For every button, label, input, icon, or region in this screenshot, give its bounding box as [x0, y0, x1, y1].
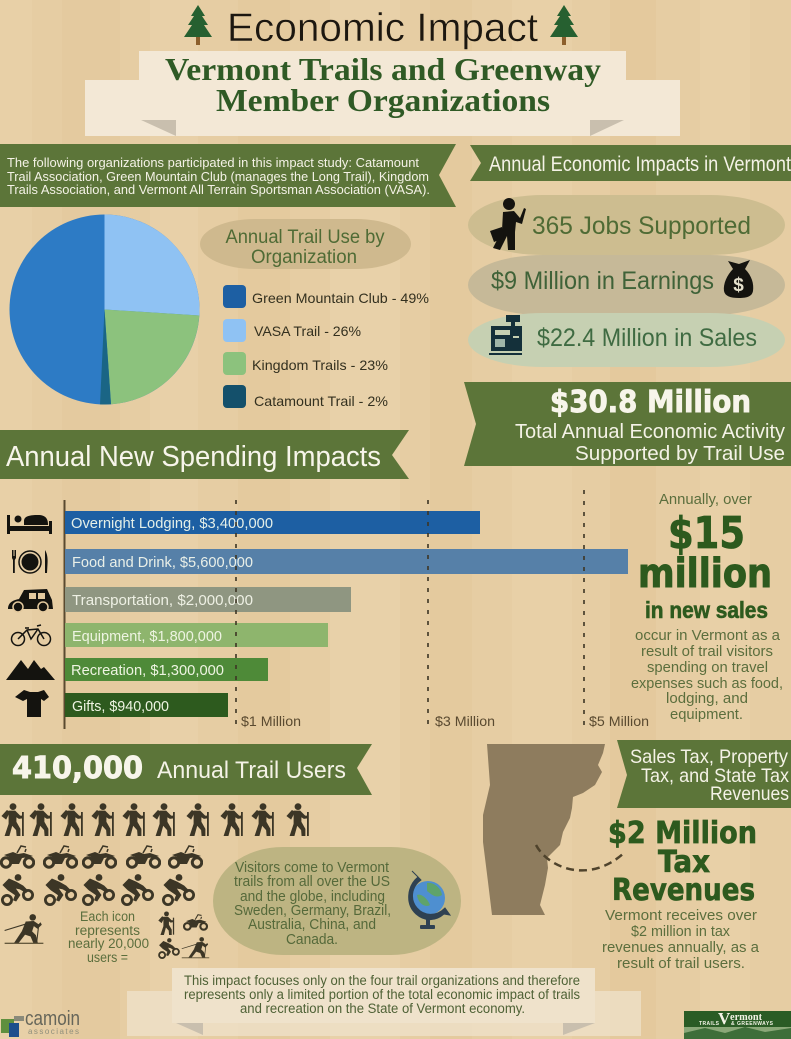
- bar: transportation: [65, 587, 351, 612]
- callout: $15 million in new sales: $15: [668, 508, 745, 559]
- pictogram: cyclists: [2, 874, 194, 905]
- oval heading: annual trail use by organization: [200, 219, 411, 269]
- dashed connector from map to tax callout: [536, 845, 625, 870]
- callout: $2 million tax revenues: $2 million in tax: [631, 923, 730, 940]
- logo: Camoin Associates: [1, 1008, 80, 1037]
- footer ribbon note: and recreation on the State of Vermont economy.: [240, 1001, 525, 1016]
- oval callout: visitors from around the globe: and the globe, including: [240, 889, 385, 905]
- bar: transportation: Transportation, $2,000,000: [72, 592, 253, 609]
- banner: annual economic impacts: [470, 145, 791, 181]
- callout: $15 million in new sales: lodging, and: [666, 690, 748, 707]
- banner: participating organizations: [0, 144, 456, 207]
- ovals: economic impact figures: [468, 195, 785, 367]
- oval callout: visitors from around the globe: Canada.: [286, 932, 338, 948]
- icon: left tree: [184, 5, 212, 45]
- logo: Camoin Associates: associates: [28, 1027, 79, 1036]
- oval: earnings: [468, 255, 785, 315]
- footer ribbon note: [127, 968, 641, 1036]
- oval: jobs: [468, 195, 785, 255]
- pictogram: ATVs: [1, 846, 202, 867]
- pie legend: Kingdom Trails - 23%: [252, 357, 388, 373]
- title: [184, 5, 578, 50]
- callout: $2 million tax revenues: revenues annually, as a: [602, 939, 760, 956]
- ribbon heading: [85, 51, 680, 136]
- callout: $15 million in new sales: equipment.: [670, 706, 743, 723]
- banner: annual new spending impacts: [0, 430, 409, 479]
- icon: mountains: [6, 660, 55, 680]
- callout: $15 million in new sales: million: [638, 551, 772, 597]
- bar: equipment: [65, 623, 328, 647]
- oval callout: visitors from around the globe: Sweden, Germany, Brazil,: [234, 903, 391, 919]
- icon legend: each icon represents nearly 20,000 users: Each icon: [80, 909, 135, 924]
- callout: $15 million in new sales: spending on travel: [647, 659, 768, 676]
- banner: total economic activity: $30.8 Million: [550, 385, 751, 420]
- banner: total economic activity: Supported by Trail Use: [575, 443, 785, 465]
- oval callout: visitors from around the globe: Australia, China, and: [248, 917, 376, 933]
- icon: bicycle: [12, 625, 50, 646]
- callout: $15 million in new sales: expenses such as food,: [631, 675, 783, 692]
- icon: money bag: [724, 260, 753, 298]
- pie legend: [223, 285, 429, 409]
- bar chart: new spending by category: [64, 490, 649, 729]
- logo: Vermont Trails and Greenways: [684, 1009, 791, 1039]
- icon: bed: [7, 515, 52, 534]
- bar: gifts: Gifts, $940,000: [72, 698, 169, 715]
- banner: participating organizations: Trails Association, and Vermont All Terrain Sportsman Association (VASA).: [7, 182, 430, 197]
- banner: total economic activity: [464, 382, 791, 466]
- callout: $15 million in new sales: Annually, over: [659, 491, 752, 508]
- ribbon heading: Member Organizations: [216, 82, 550, 118]
- callout: $2 million tax revenues: Revenues: [612, 873, 755, 908]
- bar: recreation: [65, 658, 268, 681]
- pie legend: Green Mountain Club - 49%: [252, 290, 429, 306]
- icon: walking businessperson: [490, 198, 526, 250]
- oval callout: visitors from around the globe: Visitors come to Vermont: [235, 860, 389, 876]
- pictogram: skier: [5, 914, 43, 944]
- icon legend: each icon represents nearly 20,000 users: represents: [75, 923, 140, 938]
- footer ribbon note: represents only a limited portion of the total economic impact of trails: [184, 987, 580, 1002]
- pictogram: hikers: [2, 803, 309, 836]
- oval callout: visitors from around the globe: [213, 847, 461, 955]
- bar: food and drink: [65, 549, 628, 574]
- oval heading: annual trail use by organization: Organization: [251, 247, 357, 268]
- banner: participating organizations: Trail Association, Green Mountain Club (manages the Long Trail), Kingdom: [7, 169, 429, 184]
- callout: $2 million tax revenues: result of trail users.: [617, 955, 745, 972]
- callout: $2 million tax revenues: [602, 816, 760, 972]
- ribbon heading: Vermont Trails and Greenway: [165, 51, 601, 87]
- banner: sales tax, property tax, state tax: [617, 740, 791, 808]
- icon: car: [8, 589, 53, 612]
- bar: overnight lodging: [65, 511, 480, 534]
- banner: participating organizations: The following organizations participated in this impact study: Catamount: [7, 155, 419, 170]
- oval callout: visitors from around the globe: trails from all over the US: [234, 874, 390, 890]
- pie chart: annual trail use: [10, 214, 200, 405]
- bar: food and drink: Food and Drink, $5,600,000: [72, 554, 253, 571]
- callout: $15 million in new sales: occur in Vermont as a: [635, 627, 781, 644]
- bar: equipment: Equipment, $1,800,000: [72, 628, 222, 645]
- oval: earnings: $9 Million in Earnings: [491, 267, 714, 295]
- callout: $2 million tax revenues: Tax: [658, 845, 710, 880]
- oval: sales: $22.4 Million in Sales: [537, 324, 757, 352]
- banner: 410,000 annual trail users: [0, 744, 372, 795]
- icon legend: each icon represents nearly 20,000 users: [68, 909, 209, 965]
- icon: right tree: [550, 5, 578, 45]
- callout: $15 million in new sales: result of trail visitors: [641, 643, 773, 660]
- logo: Vermont Trails and Greenways: TRAILS: [699, 1021, 720, 1027]
- icon: cash register: [489, 315, 522, 355]
- bar: overnight lodging: Overnight Lodging, $3,400,000: [71, 515, 273, 532]
- pie legend: VASA Trail - 26%: [254, 323, 361, 339]
- icon legend: each icon represents nearly 20,000 users: users =: [87, 950, 128, 965]
- icon: money bag: $: [733, 275, 744, 296]
- callout: $15 million in new sales: in new sales: [645, 597, 768, 623]
- logo: Vermont Trails and Greenways: V: [718, 1009, 731, 1028]
- title text: Economic Impact: [227, 6, 538, 50]
- oval: sales: [468, 313, 785, 367]
- axis marker: $3 million: $3 Million: [435, 713, 495, 729]
- axis marker: $1 million: $1 Million: [241, 713, 301, 729]
- icon: globe: [409, 871, 450, 929]
- logo: Vermont Trails and Greenways: & GREENWAYS: [731, 1021, 774, 1027]
- oval: jobs: 365 Jobs Supported: [532, 212, 751, 240]
- footer ribbon note: This impact focuses only on the four trail organizations and therefore: [184, 973, 580, 988]
- icon: t-shirt: [15, 690, 49, 717]
- oval heading: annual trail use by organization: Annual Trail Use by: [226, 227, 385, 248]
- callout: $15 million in new sales: [631, 491, 783, 723]
- bar: recreation: Recreation, $1,300,000: [71, 662, 224, 679]
- map: Vermont: [483, 744, 605, 915]
- banner: total economic activity: Total Annual Economic Activity: [515, 421, 785, 443]
- banner: annual new spending impacts: Annual New Spending Impacts: [6, 441, 381, 473]
- axis marker: $5 million: $5 Million: [589, 713, 649, 729]
- logo: Vermont Trails and Greenways: ermont: [730, 1012, 763, 1023]
- banner: 410,000 annual trail users: Annual Trail Users: [157, 757, 346, 784]
- bar: gifts: [65, 693, 228, 717]
- callout: $2 million tax revenues: $2 Million: [608, 816, 757, 851]
- icon: plate and cutlery: [12, 550, 48, 573]
- logo: Camoin Associates: camoin: [25, 1008, 80, 1030]
- pie legend: Catamount Trail - 2%: [254, 393, 388, 409]
- icon legend: each icon represents nearly 20,000 users: nearly 20,000: [68, 936, 149, 951]
- banner: 410,000 annual trail users: 410,000: [12, 751, 143, 786]
- callout: $2 million tax revenues: Vermont receives over: [605, 907, 757, 924]
